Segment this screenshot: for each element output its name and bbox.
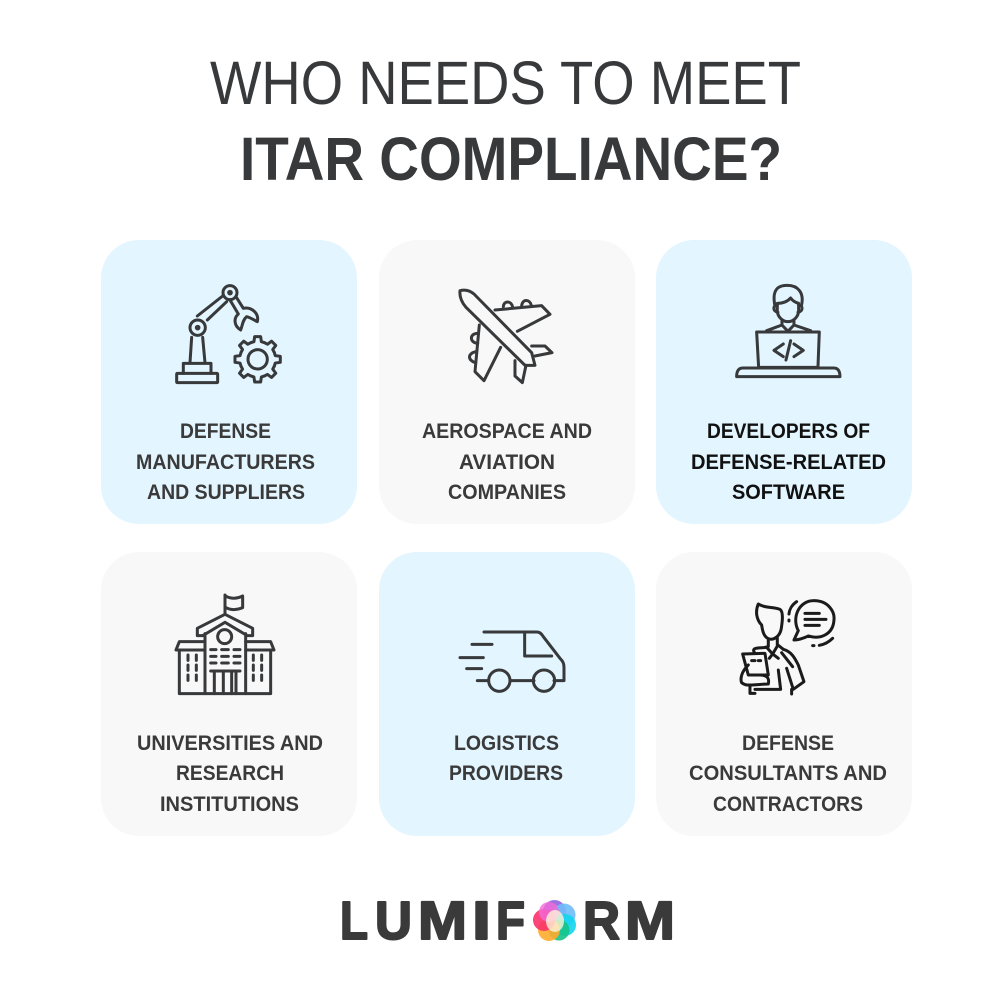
panel: universities [101, 552, 357, 836]
label: AEROSPACE AND [422, 420, 592, 443]
icon: delivery van [460, 632, 564, 691]
label [689, 732, 887, 816]
panel: software developers [656, 240, 912, 524]
icon: logo flower [533, 900, 576, 941]
label: DEFENSE [742, 732, 834, 755]
label [422, 420, 592, 504]
icon: developer at laptop [737, 285, 840, 377]
logo: Lumiform [340, 891, 675, 951]
logo: Lumiform: M [418, 891, 467, 951]
label: MANUFACTURERS [136, 451, 315, 474]
logo: Lumiform: F [496, 891, 525, 951]
label: COMPANIES [448, 481, 566, 504]
icon: robot arm and gear [177, 286, 280, 383]
panel: logistics [379, 552, 635, 836]
title: ITAR COMPLIANCE? [240, 125, 782, 193]
icon: university building [176, 595, 274, 694]
logo: Lumiform: R [583, 891, 620, 951]
label [449, 732, 563, 785]
label: SOFTWARE [732, 481, 845, 504]
label: CONSULTANTS AND [689, 762, 887, 785]
label: AND SUPPLIERS [147, 481, 305, 504]
panel: consultants [656, 552, 912, 836]
logo: Lumiform: I [472, 891, 491, 951]
panel: defense manufacturers [101, 240, 357, 524]
logo: Lumiform: M [625, 891, 675, 951]
label: DEVELOPERS OF [707, 420, 870, 443]
icon: airplane [460, 290, 552, 383]
title [210, 49, 801, 193]
label: AVIATION [459, 451, 555, 474]
label: UNIVERSITIES AND [137, 732, 323, 755]
logo: Lumiform: U [375, 891, 412, 951]
label: INSTITUTIONS [160, 793, 299, 816]
label: CONTRACTORS [713, 793, 863, 816]
title: WHO NEEDS TO MEET [210, 49, 801, 117]
logo: Lumiform: L [340, 891, 368, 951]
label [691, 420, 886, 504]
label: LOGISTICS [454, 732, 559, 755]
panel: aerospace [379, 240, 635, 524]
label [137, 732, 323, 816]
label: RESEARCH [176, 762, 284, 785]
label [136, 420, 315, 504]
label: DEFENSE-RELATED [691, 451, 886, 474]
icon: consultant with speech bubble [741, 601, 834, 694]
label: DEFENSE [180, 420, 271, 443]
label: PROVIDERS [449, 762, 563, 785]
